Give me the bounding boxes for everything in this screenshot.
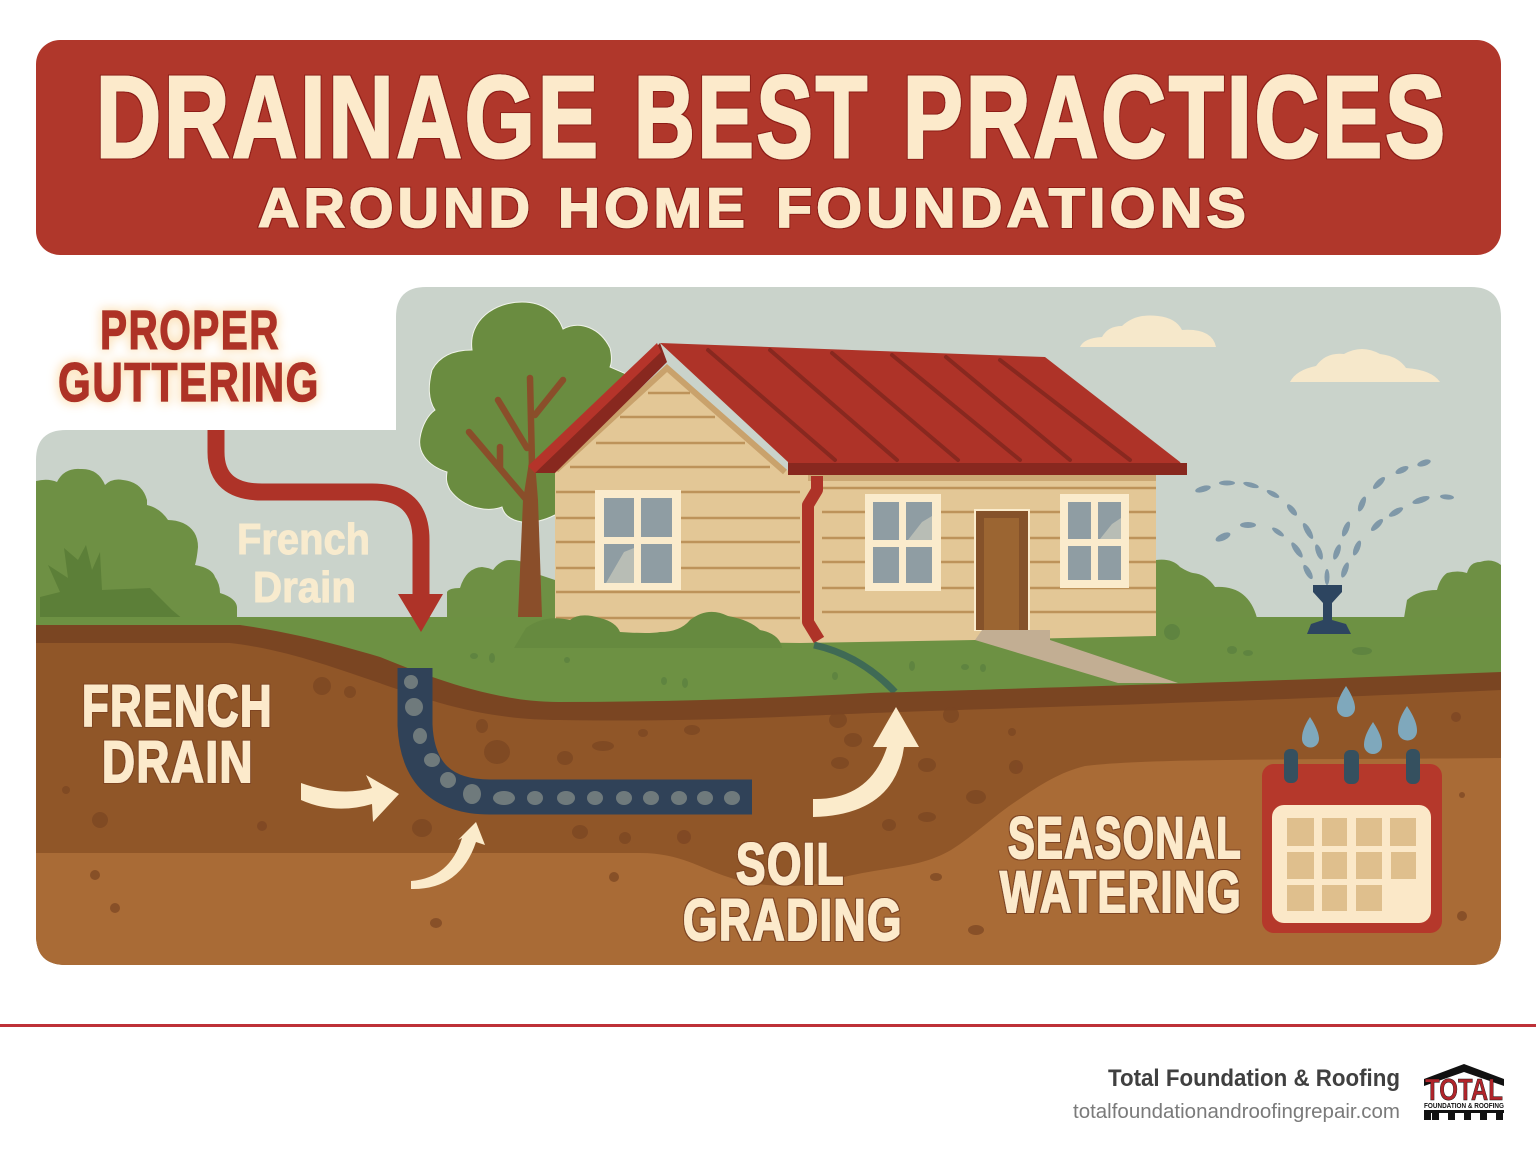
text: proper guttering: PROPER	[100, 299, 280, 361]
roof ribs	[708, 350, 1130, 460]
sprinkler spray	[1194, 458, 1454, 585]
sprinkler head	[1307, 585, 1351, 634]
logo: FOUNDATION & ROOFING	[1424, 1101, 1504, 1110]
french drain pipe	[404, 668, 752, 805]
footer divider	[0, 1024, 1536, 1027]
window right	[1060, 494, 1129, 588]
calendar cells	[1287, 818, 1416, 911]
window left	[595, 490, 681, 590]
arrow: soil grading	[813, 707, 919, 817]
house	[528, 343, 1187, 643]
text: soil grading: SOIL	[736, 832, 845, 897]
text: seasonal watering	[1000, 806, 1242, 925]
icon: calendar	[1262, 749, 1442, 933]
text: proper guttering	[58, 299, 320, 413]
arrow: gutter flow	[216, 430, 443, 632]
main title: DRAINAGE	[96, 52, 601, 182]
soil layers	[36, 625, 1501, 965]
walkway	[975, 630, 1178, 683]
house wall	[555, 365, 1156, 643]
subtitle: AROUND	[258, 176, 534, 239]
text: french drain sky label: French	[237, 515, 370, 564]
icon: small bush by tree	[447, 560, 555, 618]
title banner	[36, 40, 1501, 255]
icon: sprinkler	[1194, 458, 1454, 634]
dark topsoil	[36, 625, 1501, 720]
footer company name: Total Foundation & Roofing	[1108, 1065, 1400, 1092]
icon: front shrubs	[555, 612, 780, 643]
lower soil	[36, 758, 1501, 965]
text: french drain	[82, 674, 273, 795]
left gable fascia	[535, 343, 667, 473]
text: proper guttering: GUTTERING	[58, 351, 320, 413]
icon: tree trunk and branches	[469, 378, 563, 617]
text: french drain sky label: Drain	[253, 563, 356, 612]
subtitle: HOME	[558, 176, 749, 239]
text: seasonal watering: SEASONAL	[1008, 806, 1242, 871]
window middle	[865, 494, 941, 591]
text: soil grading: GRADING	[683, 888, 903, 953]
arrow: water into drain from below	[411, 822, 485, 889]
downspout	[808, 476, 819, 640]
subtitle: FOUNDATIONS	[776, 176, 1250, 239]
siding lines	[556, 393, 1156, 618]
calendar rings	[1284, 749, 1420, 784]
lawn	[40, 617, 1501, 702]
logo	[1424, 1064, 1504, 1120]
swale	[814, 645, 895, 692]
icon: clouds	[1080, 315, 1440, 382]
icon: left bush	[36, 468, 237, 617]
icon: tree crown	[420, 302, 640, 522]
text: soil grading	[683, 832, 903, 953]
soil specks	[62, 677, 1467, 935]
door	[974, 509, 1030, 631]
text: french drain sky label	[237, 515, 370, 612]
text: french drain: FRENCH	[82, 674, 273, 739]
text: seasonal watering: WATERING	[1000, 860, 1242, 925]
upper soil	[36, 643, 1501, 965]
main title: BEST	[634, 52, 870, 182]
icon: water drops	[1302, 686, 1417, 754]
logo: TOTAL	[1425, 1072, 1503, 1107]
main title	[96, 52, 1448, 182]
roof	[660, 343, 1180, 463]
roof fascia	[788, 463, 1187, 475]
gable trim	[556, 368, 785, 472]
text: french drain: DRAIN	[102, 730, 254, 795]
arrow: water into drain from left	[301, 775, 399, 822]
icon: right bushes	[1156, 560, 1501, 618]
panel: house cross-section scene	[36, 287, 1501, 965]
subtitle	[258, 176, 1250, 239]
footer url: totalfoundationandroofingrepair.com	[1073, 1100, 1400, 1123]
